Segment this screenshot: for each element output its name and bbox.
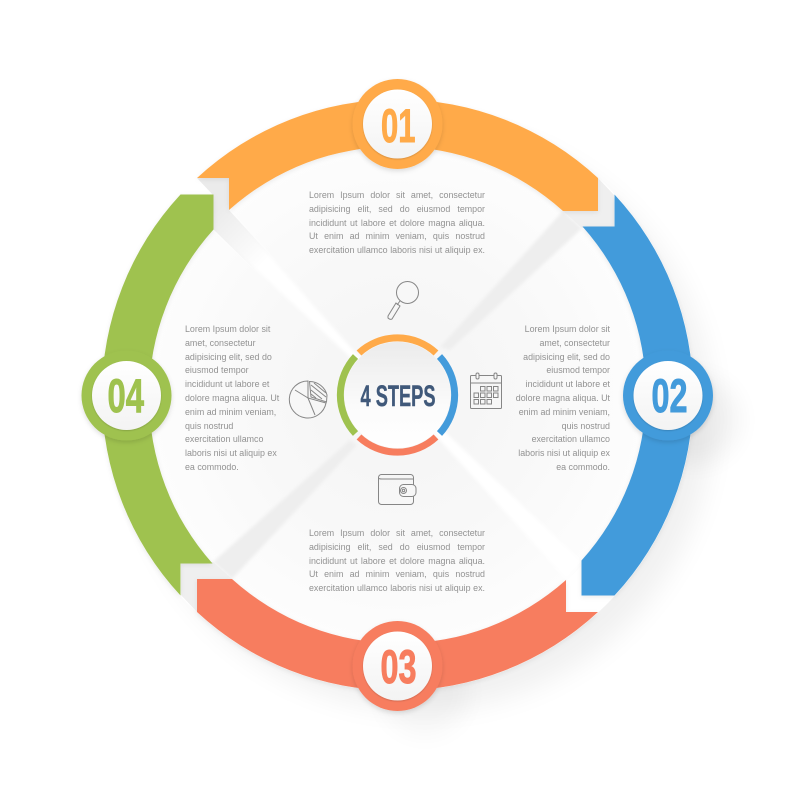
centre hub: 4 STEPS — [360, 380, 436, 413]
text block: step 03: incididunt ut labore et dolore magna aliqua. — [309, 556, 485, 566]
text block: step 04: ea commodo. — [185, 462, 239, 472]
text block: step 04: exercitation ullamco — [185, 434, 263, 444]
icon: pie chart — [289, 381, 327, 418]
text block: step 02: quis nostrud — [562, 421, 610, 431]
text block: step 04: dolore magna aliqua. Ut — [185, 393, 279, 403]
grey fold top right — [440, 211, 582, 350]
badge 02 — [623, 350, 713, 440]
text block: step 02: ea commodo. — [556, 462, 610, 472]
grey fold bottom left — [213, 440, 357, 579]
white diagonal strip — [213, 210, 582, 579]
icon: wallet — [378, 474, 416, 504]
badge 02: 02 — [652, 369, 688, 422]
text block: step 04: adipisicing elit, sed do — [185, 352, 272, 362]
badge 01: 01 — [381, 99, 416, 152]
text block: step 04: enim ad minim veniam, — [185, 407, 276, 417]
badge 04 — [82, 350, 172, 440]
centre hub — [340, 338, 455, 452]
long shadow — [128, 126, 739, 736]
icon: magnifying glass — [388, 282, 418, 319]
text block: step 04: Lorem Ipsum dolor sit — [185, 324, 270, 334]
text block: step 02: exercitation ullamco — [532, 434, 610, 444]
grey notch top right — [563, 178, 614, 228]
text block: step 03: adipisicing elit, sed do eiusmod tempor — [309, 542, 485, 552]
text block: step 01 — [309, 190, 485, 255]
text block: step 03: Ut enim ad minim veniam, quis nostrud — [309, 569, 485, 579]
text block: step 03: Lorem Ipsum dolor sit amet, consectetur — [309, 528, 485, 538]
text block: step 04: amet, consectetur — [185, 338, 256, 348]
icon: calendar — [470, 373, 502, 408]
badge 03: 03 — [380, 640, 416, 693]
text block: step 03: exercitation ullamco laboris nisi ut aliquip ex. — [309, 583, 485, 593]
panel: blue arc — [582, 194, 693, 596]
panel: orange arc — [197, 99, 598, 211]
text block: step 01: exercitation ullamco laboris nisi ut aliquip ex. — [309, 245, 485, 255]
text block: step 03 — [309, 528, 485, 593]
text block: step 02: eiusmod tempor — [546, 365, 610, 375]
text block: step 01: incididunt ut labore et dolore magna aliqua. — [309, 218, 485, 228]
grey notch bottom left — [181, 562, 232, 612]
text block: step 04: quis nostrud — [185, 421, 233, 431]
badge 01 — [352, 79, 442, 169]
text block: step 02: dolore magna aliqua. Ut — [516, 393, 610, 403]
text block: step 04: incididunt ut labore et — [185, 379, 269, 389]
text block: step 02: adipisicing elit, sed do — [523, 352, 610, 362]
text block: step 02: enim ad minim veniam, — [519, 407, 610, 417]
text block: step 01: adipisicing elit, sed do eiusmod tempor — [309, 204, 485, 214]
grey fold top left — [197, 178, 270, 270]
text block: step 01: Ut enim ad minim veniam, quis nostrud — [309, 231, 485, 241]
text block: step 02: incididunt ut labore et — [526, 379, 610, 389]
badge 03 — [352, 621, 442, 711]
text block: step 02 — [516, 324, 610, 472]
panel: green arc — [102, 194, 214, 596]
text block: step 02: laboris nisi ut aliquip ex — [518, 448, 610, 458]
panel: central disc — [146, 144, 648, 646]
text block: step 04 — [185, 324, 280, 472]
text block: step 02: amet, consectetur — [539, 338, 610, 348]
panel: red arc — [197, 579, 598, 691]
text block: step 01: Lorem Ipsum dolor sit amet, consectetur — [309, 190, 485, 200]
badge 04: 04 — [108, 369, 144, 422]
text block: step 02: Lorem Ipsum dolor sit — [525, 324, 610, 334]
text block: step 04: eiusmod tempor — [185, 365, 249, 375]
text block: step 04: laboris nisi ut aliquip ex — [185, 448, 277, 458]
